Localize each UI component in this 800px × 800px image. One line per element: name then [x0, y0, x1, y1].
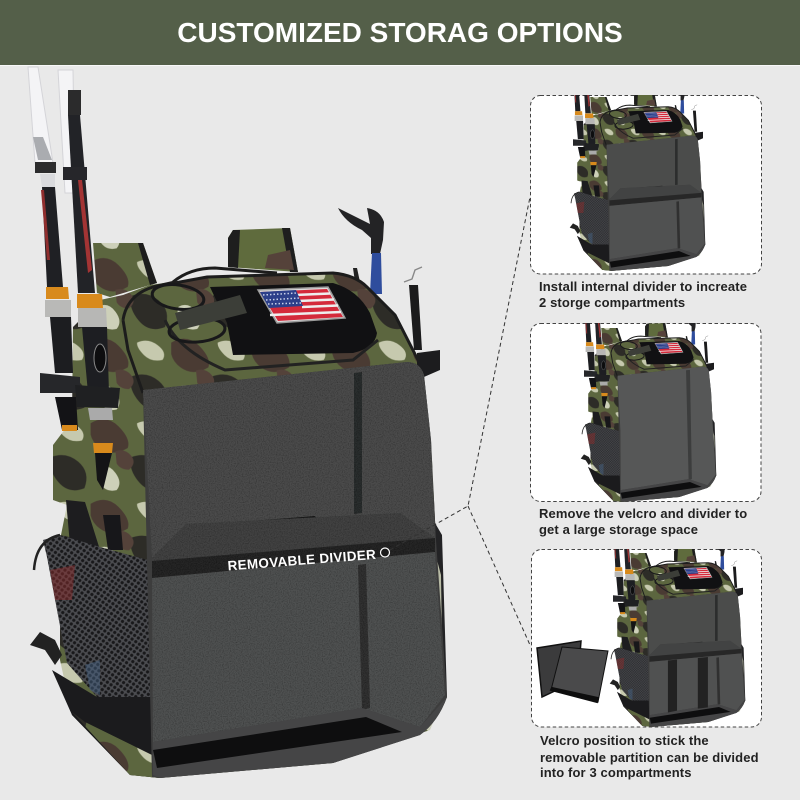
caption: three compartments: Velcro position to stick the	[540, 733, 709, 748]
caption: three compartments: into for 3 compartments	[540, 765, 692, 780]
callout connector lines	[380, 197, 530, 645]
icon: removable partition sheets	[537, 641, 608, 702]
caption: large storage: get a large storage space	[539, 522, 698, 537]
title: CUSTOMIZED STORAG OPTIONS	[177, 17, 623, 48]
caption: three compartments: removable partition can be divided	[540, 750, 759, 765]
caption: two compartments: 2 storge compartments	[539, 295, 685, 310]
divider label: REMOVABLE DIVIDER	[227, 547, 377, 573]
panel: two compartments	[530, 95, 762, 274]
caption: two compartments: Install internal divider to increate	[539, 279, 747, 294]
panel: three compartments	[531, 549, 762, 728]
backpack without divider	[580, 323, 716, 502]
main backpack with removable divider	[28, 67, 447, 778]
header band	[0, 0, 800, 66]
backpack with three partitions	[610, 549, 746, 727]
caption: large storage: Remove the velcro and divider to	[539, 506, 747, 521]
panel: large storage space	[530, 323, 762, 502]
backpack with divider	[570, 95, 706, 271]
